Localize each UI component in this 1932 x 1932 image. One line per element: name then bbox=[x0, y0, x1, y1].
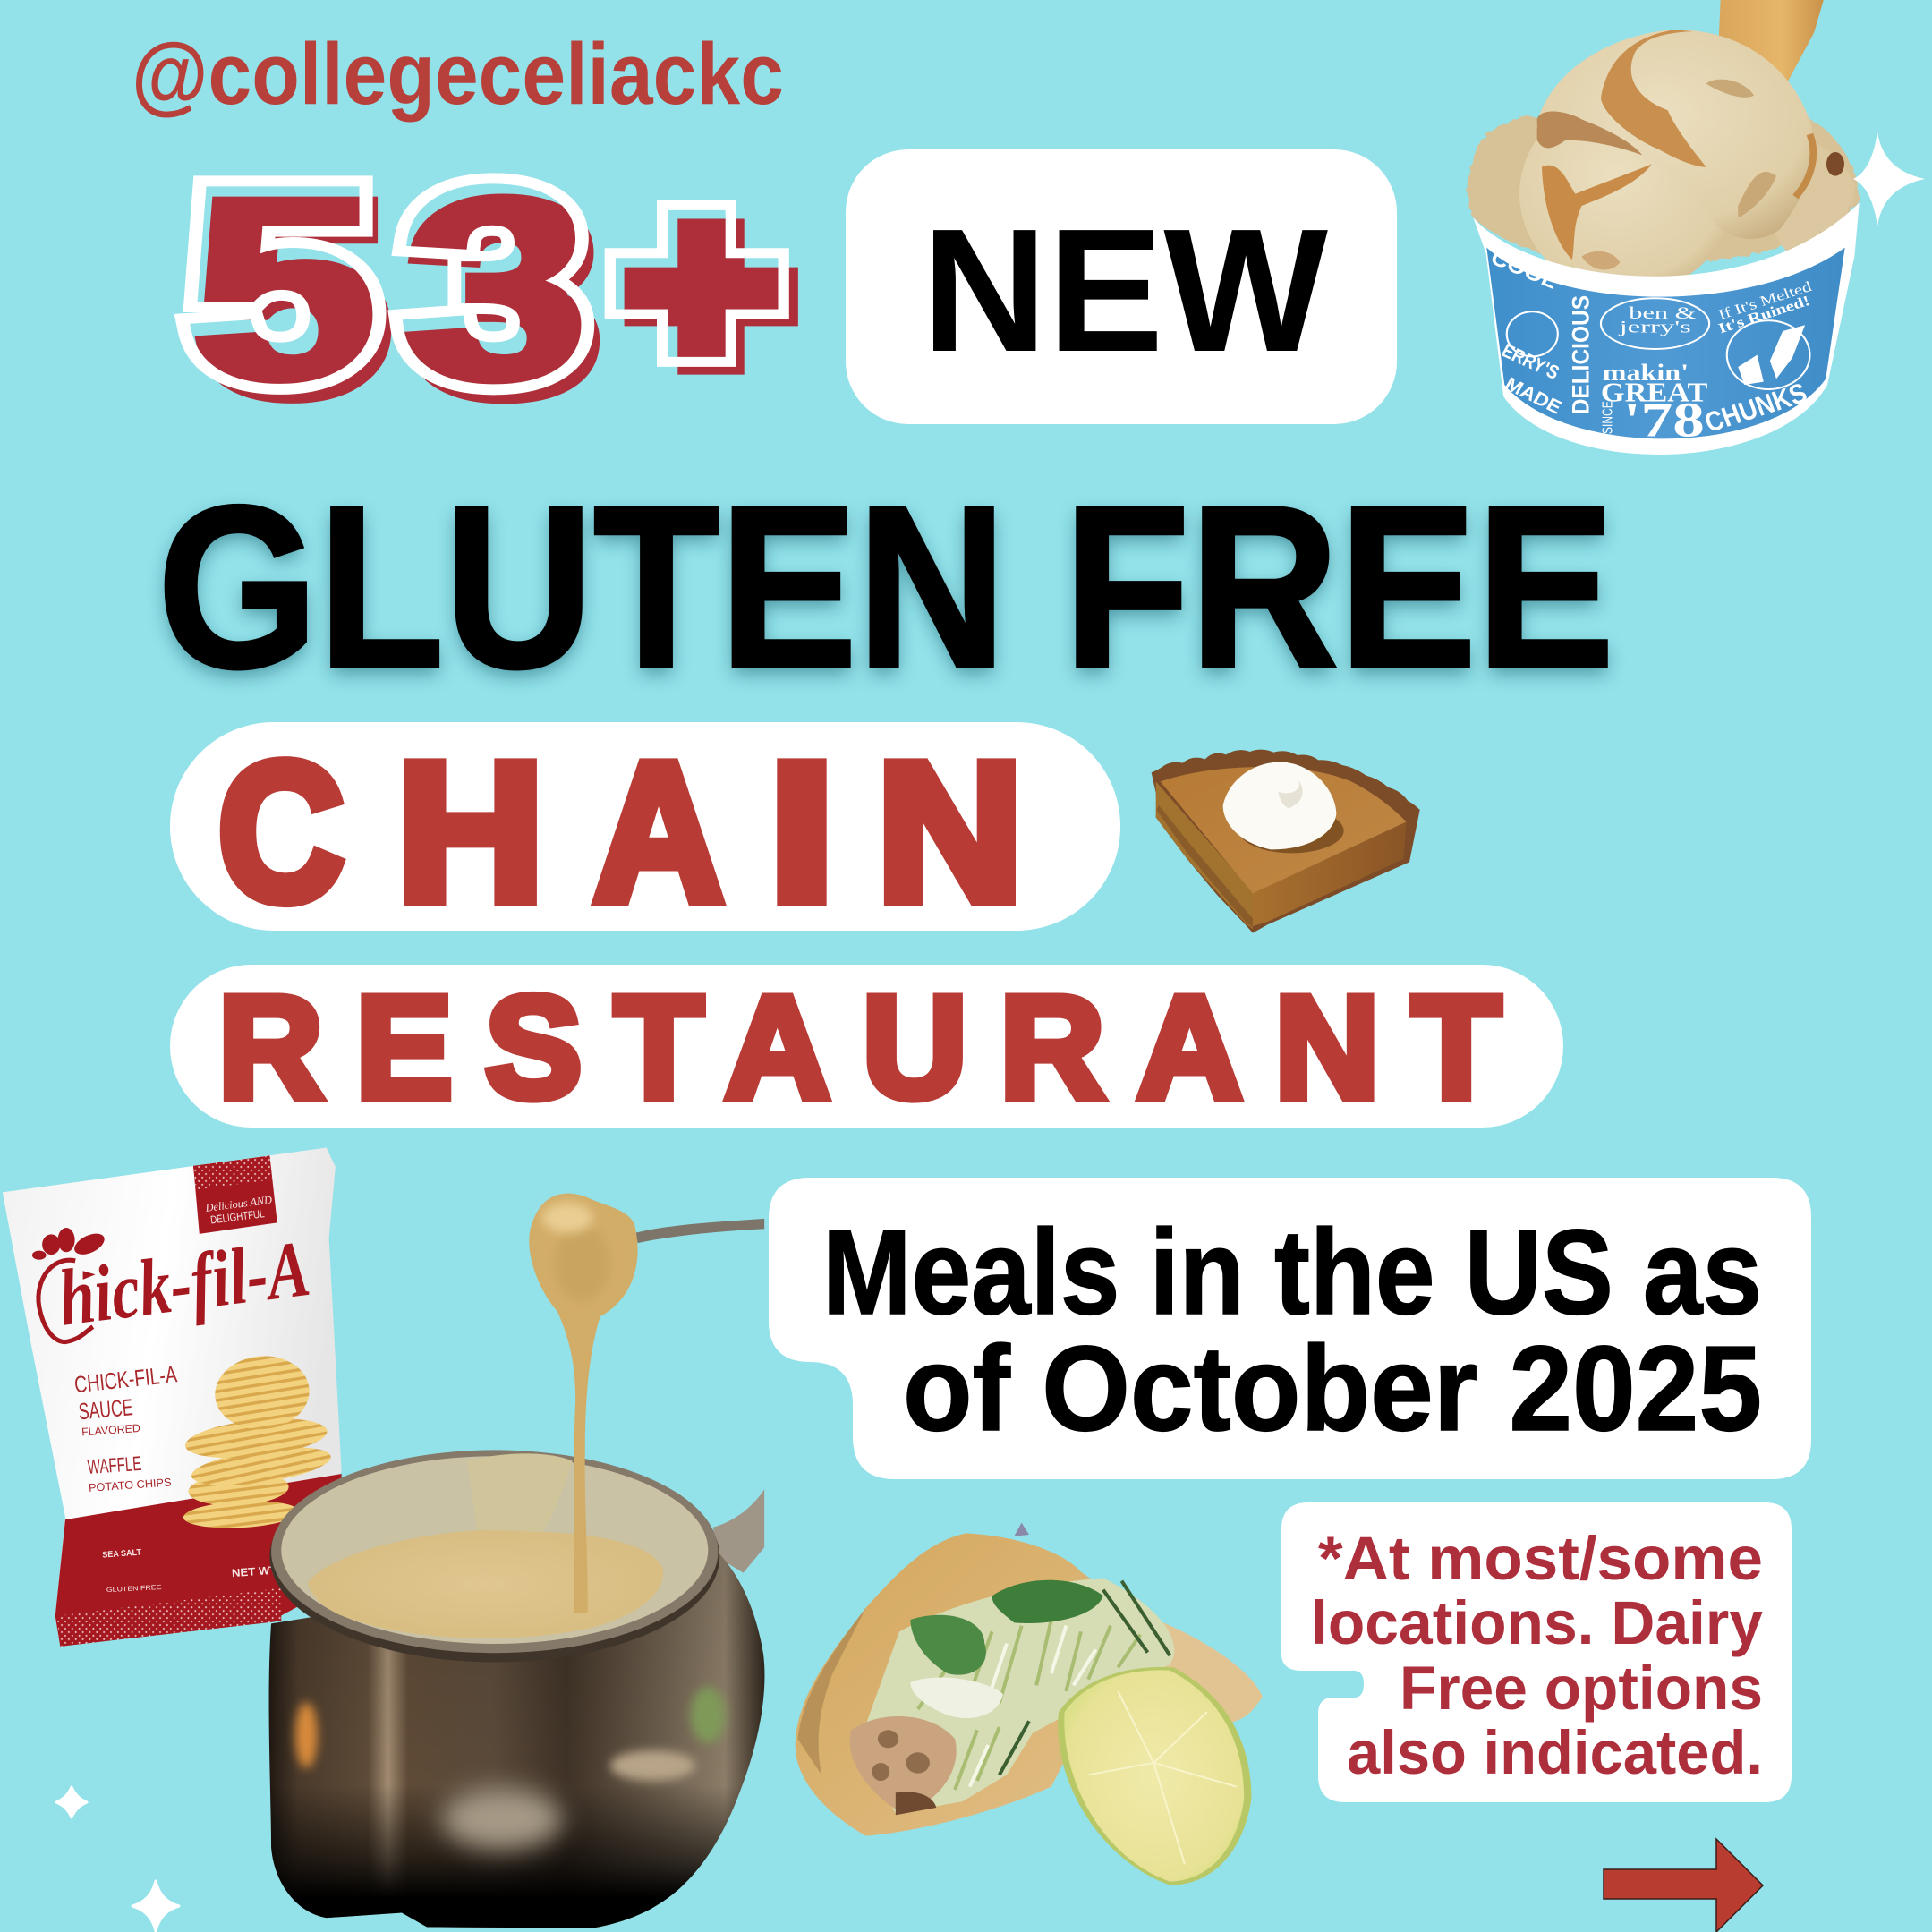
bubble: meals in the US bbox=[769, 1178, 1811, 1479]
CHAIN pill: H bbox=[396, 723, 544, 941]
cup lettering: CHUNKS bbox=[1700, 377, 1811, 438]
icon: chick-fil-a chip bag: WAFFLE bbox=[87, 1452, 142, 1478]
bubble: footnote: also indicated. bbox=[1347, 1718, 1763, 1787]
RESTAURANT pill: RESTAURANT bbox=[218, 966, 1501, 1128]
CHAIN pill bbox=[170, 722, 1120, 941]
icon: ice cream cup bbox=[1468, 0, 1860, 455]
cup lettering: ben & bbox=[1629, 304, 1697, 323]
cup lettering: MADE bbox=[1502, 373, 1565, 418]
cup lettering: DELICIOUS bbox=[1567, 295, 1595, 414]
bubble: footnote bbox=[1281, 1502, 1792, 1802]
cup lettering: GREAT bbox=[1601, 377, 1707, 407]
icon: chick-fil-a chip bag: SAUCE bbox=[78, 1395, 134, 1425]
icon: fondue pot with dipped food bbox=[269, 1194, 764, 1928]
icon: chick-fil-a chip bag: POTATO CHIPS bbox=[89, 1476, 172, 1494]
icon: pumpkin pie slice bbox=[1152, 750, 1420, 933]
NEW pill bbox=[846, 149, 1397, 424]
icon: chick-fil-a chip bag: NET WT bbox=[232, 1564, 277, 1579]
sparkle top right bbox=[1853, 132, 1925, 226]
bubble: footnote: *At most/some bbox=[1318, 1524, 1763, 1593]
headline GLUTEN FREE: GLUTEN FREE bbox=[157, 464, 1614, 723]
bubble: meals in the US: of October 2025 bbox=[903, 1321, 1762, 1456]
cup lettering: ERRY'S bbox=[1498, 339, 1563, 384]
cup lettering: jerry's bbox=[1618, 318, 1691, 336]
sparkle bottom left small bbox=[56, 1787, 87, 1817]
headline GLUTEN FREE: GLUTEN FREE bbox=[157, 457, 1614, 716]
cup lettering: SINCE bbox=[1600, 401, 1616, 434]
bubble: footnote: locations. Dairy bbox=[1311, 1588, 1763, 1657]
cup lettering: COOL bbox=[1487, 246, 1562, 294]
CHAIN pill: I bbox=[769, 723, 835, 941]
chip stack bbox=[183, 1352, 333, 1531]
icon: chick-fil-a chip bag: Delicious AND bbox=[204, 1194, 273, 1214]
NEW pill: NEW bbox=[922, 192, 1328, 388]
bubble: meals in the US: Meals in the US as bbox=[822, 1204, 1762, 1340]
big number 53+: 5 bbox=[199, 148, 388, 448]
handle text: @collegeceliackc bbox=[132, 25, 784, 123]
bubble: footnote: Free options bbox=[1400, 1654, 1763, 1723]
sparkle bottom left large bbox=[132, 1881, 179, 1931]
cup lettering bbox=[1487, 246, 1815, 447]
cup lettering: It's Ruined! bbox=[1716, 292, 1812, 336]
big number 53+: + bbox=[631, 157, 791, 430]
icon: chick-fil-a chip bag: hick-fil-A bbox=[55, 1225, 314, 1343]
icon: taco with lime bbox=[796, 1523, 1263, 1885]
big number 53+: 3 bbox=[410, 148, 600, 448]
CHAIN pill: C bbox=[218, 723, 344, 941]
chicken comb bbox=[32, 1228, 107, 1280]
cup lettering: makin' bbox=[1603, 360, 1689, 386]
icon: chick-fil-a chip bag bbox=[3, 1147, 342, 1647]
big number 53+ bbox=[174, 173, 798, 404]
icon: chick-fil-a chip bag: GLUTEN FREE bbox=[106, 1583, 162, 1594]
icon: chick-fil-a chip bag: CHICK-FIL-A bbox=[73, 1362, 179, 1398]
cup lettering: If It's Melted bbox=[1716, 277, 1815, 323]
CHAIN pill: N bbox=[877, 723, 1023, 941]
arrow: next bbox=[1604, 1839, 1763, 1932]
icon: chick-fil-a chip bag: SEA SALT bbox=[102, 1547, 141, 1561]
CHAIN pill: A bbox=[594, 723, 723, 941]
icon: chick-fil-a chip bag: DELIGHTFUL bbox=[209, 1207, 265, 1227]
cup lettering: '78 bbox=[1623, 393, 1705, 447]
icon: chick-fil-a chip bag: FLAVORED bbox=[81, 1422, 140, 1439]
